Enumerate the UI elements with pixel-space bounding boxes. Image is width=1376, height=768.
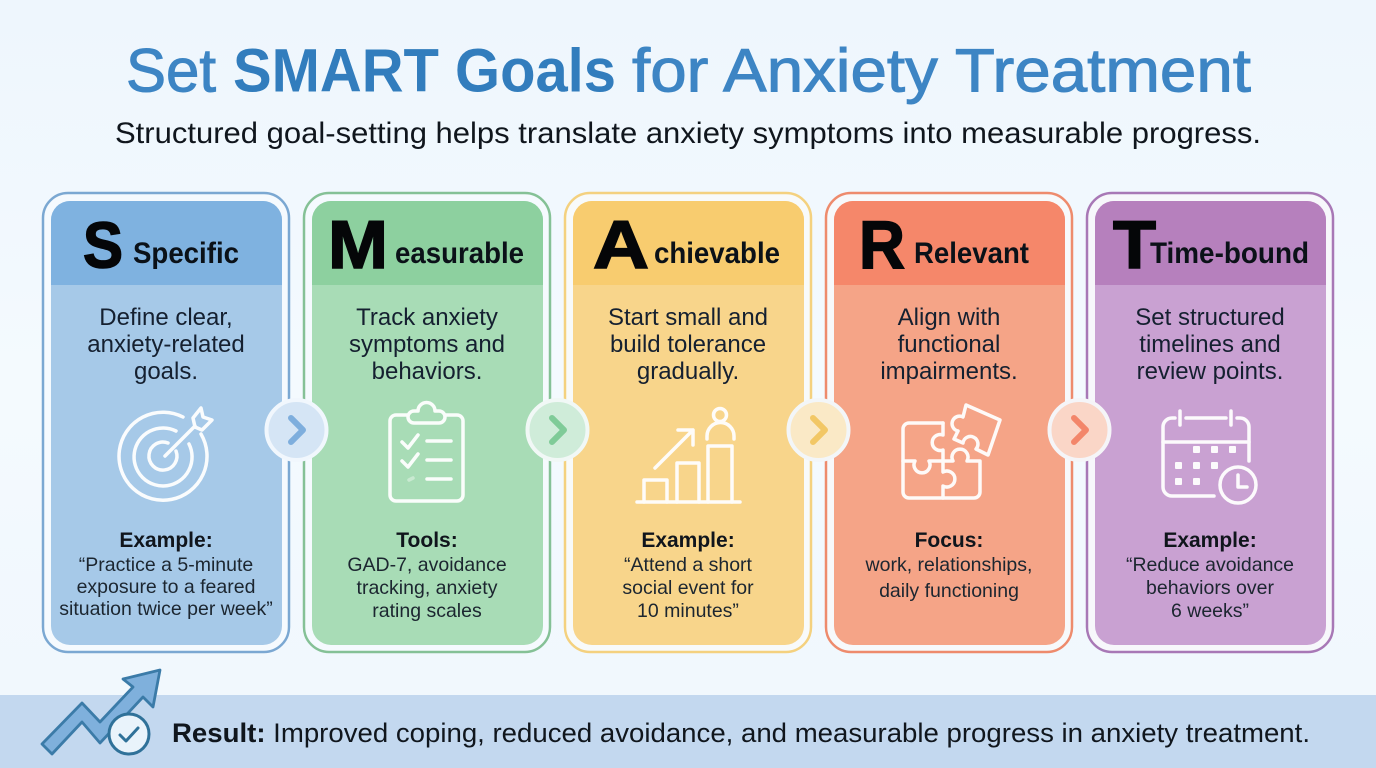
description: specific: anxiety-related: [87, 331, 245, 358]
arrow: measurable to achievable: [528, 400, 588, 460]
tools: measurable: Tools:: [396, 529, 458, 552]
example: achievable: [622, 529, 754, 622]
icon: rising arrow with check: [42, 670, 160, 754]
description: achievable: Start small and: [608, 304, 768, 331]
arrow: achievable to relevant: [788, 400, 848, 460]
description: relevant: impairments.: [880, 358, 1018, 385]
tools: measurable: rating scales: [372, 600, 482, 622]
panel: time-bound: [1087, 193, 1333, 652]
focus: relevant: [865, 529, 1032, 602]
title: [126, 36, 1251, 104]
example: achievable: 10 minutes”: [637, 600, 739, 622]
description: specific: [87, 304, 245, 385]
description: measurable: behaviors.: [372, 358, 482, 385]
focus: relevant: work, relationships,: [865, 554, 1032, 576]
header: measurable: M: [328, 207, 388, 283]
example: specific: Example:: [119, 529, 213, 552]
header: time-bound: T: [1113, 207, 1156, 283]
title: for Anxiety Treatment: [632, 36, 1251, 104]
example: specific: exposure to a feared: [77, 576, 255, 598]
example: time-bound: [1126, 529, 1294, 622]
result banner: [0, 670, 1376, 768]
focus: relevant: Focus:: [915, 529, 983, 552]
description: relevant: [880, 304, 1018, 385]
header: specific: Specific: [133, 237, 239, 270]
example: time-bound: “Reduce avoidance: [1126, 554, 1294, 576]
icon: target: [119, 408, 212, 500]
title: SMART Goals: [233, 36, 616, 104]
example: specific: [59, 529, 273, 620]
subtitle: Structured goal-setting helps translate anxiety symptoms into measurable progress.: [115, 117, 1261, 150]
arrow: specific to measurable: [266, 400, 326, 460]
header: relevant: R: [859, 207, 905, 283]
panel: relevant: [826, 193, 1072, 652]
description: measurable: symptoms and: [349, 331, 505, 358]
description: achievable: gradually.: [637, 358, 739, 385]
focus: relevant: daily functioning: [879, 580, 1019, 602]
description: time-bound: [1135, 304, 1285, 385]
header: specific: [51, 201, 282, 285]
description: time-bound: review points.: [1137, 358, 1283, 385]
header: relevant: Relevant: [914, 237, 1029, 270]
panel: measurable: [304, 193, 550, 652]
tools: measurable: [347, 529, 507, 622]
result text: Result: Improved coping, reduced avoidance, and measurable progress in anxiety treatment.: [172, 718, 1310, 748]
header: measurable: easurable: [395, 237, 524, 270]
header: achievable: chievable: [654, 237, 780, 270]
header: achievable: [573, 201, 804, 285]
icon: growth bars and person: [637, 408, 740, 502]
header: time-bound: Time-bound: [1150, 237, 1309, 270]
header: measurable: [312, 201, 543, 285]
description: time-bound: Set structured: [1135, 304, 1285, 331]
calendar date dots: [1175, 446, 1236, 485]
icon: puzzle: [903, 405, 1000, 498]
description: measurable: [349, 304, 505, 385]
description: achievable: build tolerance: [610, 331, 766, 358]
description: achievable: [608, 304, 768, 385]
arrow: relevant to time-bound: [1050, 400, 1110, 460]
panel: achievable: [565, 193, 811, 652]
description: measurable: Track anxiety: [356, 304, 498, 331]
icon: clipboard: [390, 402, 463, 501]
example: time-bound: 6 weeks”: [1171, 600, 1249, 622]
example: specific: “Practice a 5-minute: [79, 554, 253, 576]
description: relevant: Align with: [898, 304, 1000, 331]
icon: calendar with clock: [1163, 411, 1256, 503]
example: time-bound: behaviors over: [1146, 577, 1274, 599]
panel: specific: [43, 193, 289, 652]
header: relevant: [834, 201, 1065, 285]
example: time-bound: Example:: [1163, 529, 1257, 552]
header: time-bound: [1095, 201, 1326, 285]
header: specific: S: [83, 208, 123, 282]
example: achievable: social event for: [622, 577, 754, 599]
example: specific: situation twice per week”: [59, 598, 273, 620]
description: specific: Define clear,: [99, 304, 233, 331]
example: achievable: “Attend a short: [624, 554, 753, 576]
example: achievable: Example:: [641, 529, 735, 552]
header: achievable: A: [593, 207, 649, 283]
tools: measurable: tracking, anxiety: [357, 577, 498, 599]
tools: measurable: GAD-7, avoidance: [347, 554, 507, 576]
description: time-bound: timelines and: [1139, 331, 1281, 358]
description: relevant: functional: [898, 331, 1000, 358]
title: Set: [126, 36, 216, 104]
description: specific: goals.: [134, 358, 198, 385]
